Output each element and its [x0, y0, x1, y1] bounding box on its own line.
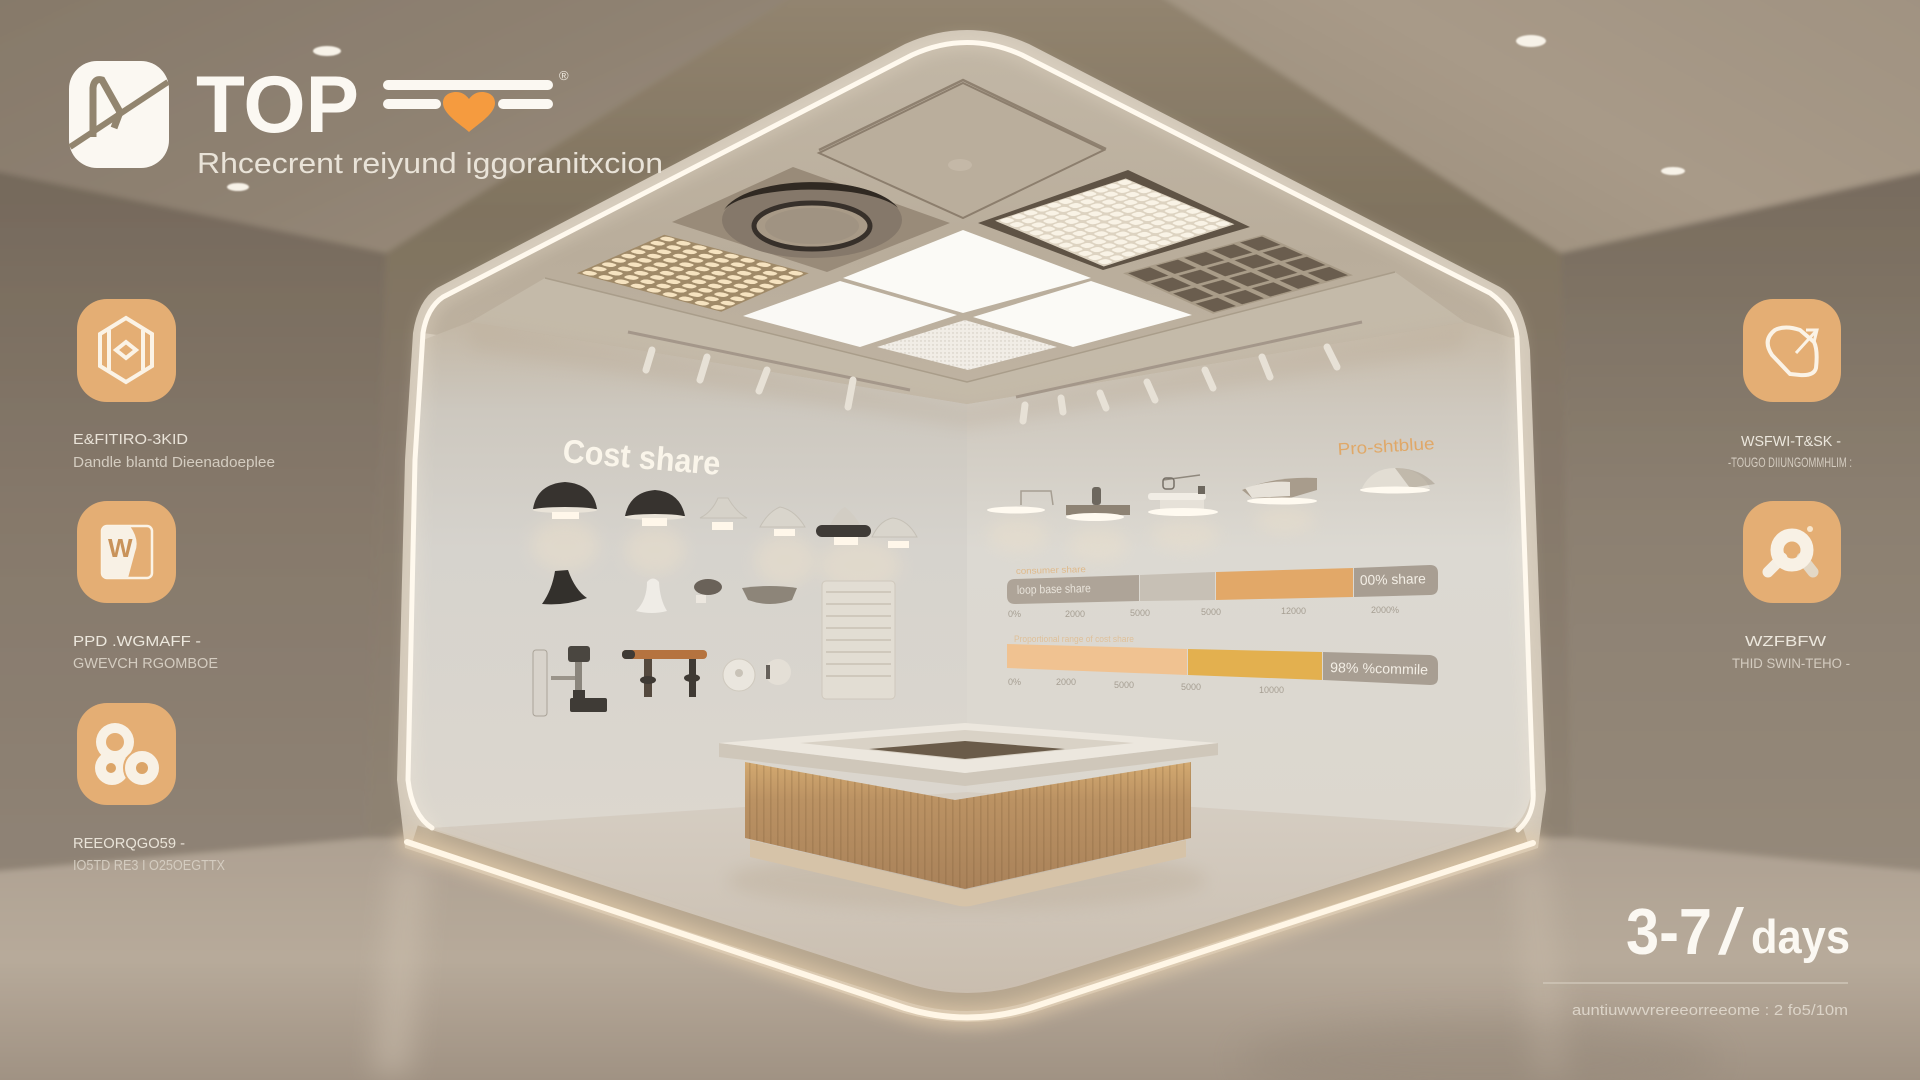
- bar one segments: [1007, 565, 1438, 604]
- panel: white light top: [843, 230, 1091, 313]
- bar two caption: Proportional range of cost share: [1014, 634, 1134, 644]
- sublabel: GWEVCH RGOMBOE: [73, 655, 218, 672]
- timeline stat: [1572, 895, 1850, 1019]
- sublabel: THID SWIN-TEHO -: [1732, 655, 1850, 671]
- ceiling fascia: [470, 272, 1465, 428]
- bar one caption: consumer share: [1016, 564, 1086, 576]
- lamp three: [1148, 475, 1218, 516]
- showroom frame band: [397, 30, 1546, 1022]
- bracket fixture: [533, 646, 607, 716]
- counter top slab: [719, 723, 1218, 786]
- bar one axis: 2000%: [1371, 605, 1399, 615]
- right track light: [1016, 322, 1362, 421]
- bar one axis: [1008, 605, 1399, 619]
- panel: plain access hatch: [819, 80, 1106, 218]
- panel: white light right: [973, 281, 1192, 347]
- stat value: 3-7: [1626, 895, 1712, 968]
- bar chart one: [1007, 564, 1438, 619]
- central island counter: [719, 723, 1218, 910]
- label: REEORQGO59 -: [73, 835, 185, 852]
- louvre panel: [822, 581, 895, 699]
- bar two axis: 10000: [1259, 685, 1284, 695]
- bar two value: 98% %commile: [1330, 659, 1429, 678]
- dome lamps: [533, 482, 917, 548]
- ceiling spot lights: [227, 35, 1685, 191]
- icon: rolls: [77, 703, 176, 805]
- lamp glow: [531, 519, 900, 591]
- icon: hexagon: [77, 299, 176, 402]
- icon: magnifier: [1743, 501, 1841, 603]
- sublabel: IO5TD RE3 I O25OEGTTX: [73, 857, 225, 874]
- bar two axis: 0%: [1008, 677, 1021, 687]
- disc fittings: [723, 659, 791, 691]
- sublabel: -TOUGO DIIUNGOMMHLIM :: [1728, 454, 1852, 470]
- orange pipe fixture: [622, 650, 707, 697]
- floor reflections: [372, 860, 1720, 1080]
- bar one axis: 5000: [1130, 608, 1150, 618]
- brand logo: [69, 60, 663, 180]
- lamp one: [987, 491, 1053, 514]
- left feature: one: [73, 299, 275, 471]
- ceiling panels: [577, 80, 1353, 370]
- floor shadow channel: [415, 834, 1525, 1002]
- wall lamps row two: [542, 570, 797, 613]
- right feature: one: [1728, 299, 1852, 470]
- label: E&FITIRO-3KID: [73, 431, 188, 448]
- right wall lamps: [987, 468, 1435, 563]
- left feature: two: [73, 501, 218, 672]
- bar two axis: 2000: [1056, 677, 1076, 687]
- logo bars: [383, 80, 553, 109]
- logo wordmark: TOP: [196, 60, 359, 150]
- left feature: three: [73, 703, 225, 874]
- interior floor: [432, 792, 1512, 994]
- logo tagline: Rhcecrent reiyund iggoranitxcion: [197, 148, 663, 180]
- label: WZFBFW: [1745, 633, 1827, 650]
- bar one axis: 5000: [1201, 607, 1221, 617]
- panel: dark grid: [1123, 235, 1353, 314]
- counter shadow: [727, 850, 1207, 910]
- right feature: two: [1732, 501, 1850, 671]
- logo heart: [443, 92, 495, 132]
- counter base: [750, 840, 1186, 906]
- bar two axis: [1008, 677, 1284, 695]
- bar one labels: loop base share: [1017, 581, 1091, 597]
- bar chart two: [1007, 634, 1438, 695]
- lamp two: [1066, 487, 1130, 521]
- bar two axis: 5000: [1181, 682, 1201, 692]
- panel: warm grid: [577, 235, 809, 312]
- bar one value: 00% share: [1360, 570, 1426, 588]
- panel: white light left: [743, 281, 957, 347]
- icon: tag: [1743, 299, 1841, 402]
- frame light strip: [407, 42, 1533, 1018]
- panel: round diffuser: [672, 167, 950, 272]
- label: WSFWI-T&SK -: [1741, 433, 1841, 450]
- interior left wall: [408, 322, 967, 828]
- stat note: auntiuwwvrereeorreeome : 2 fo5/10m: [1572, 1002, 1848, 1019]
- panel: light grid: [978, 170, 1250, 270]
- sublabel: Dandle blantd Dieenadoeplee: [73, 454, 275, 471]
- panel: speckled tile: [877, 320, 1057, 370]
- icon: document: W: [108, 533, 133, 563]
- bar one axis: 12000: [1281, 606, 1306, 616]
- lamp five: [1360, 468, 1435, 494]
- bar one axis: 2000: [1065, 609, 1085, 619]
- right wall heading: Pro-shtblue: [1337, 434, 1435, 459]
- lamp four: [1242, 478, 1317, 504]
- stat unit: days: [1751, 910, 1850, 963]
- counter wood body: [745, 762, 1191, 889]
- registered mark: ®: [559, 68, 569, 83]
- icon: document: [77, 501, 176, 603]
- left wall fixtures: [531, 482, 917, 716]
- wall heading: cost share: Cost share: [561, 432, 722, 482]
- interior right wall: [967, 322, 1533, 828]
- stat slash: /: [1718, 895, 1745, 968]
- interior ceiling: [423, 42, 1517, 410]
- bar two axis: 5000: [1114, 680, 1134, 690]
- left track light: [628, 332, 910, 407]
- bar one axis: 0%: [1008, 609, 1021, 619]
- bar two segments: [1007, 644, 1438, 685]
- logo mark: [69, 61, 169, 168]
- label: PPD .WGMAFF -: [73, 633, 201, 650]
